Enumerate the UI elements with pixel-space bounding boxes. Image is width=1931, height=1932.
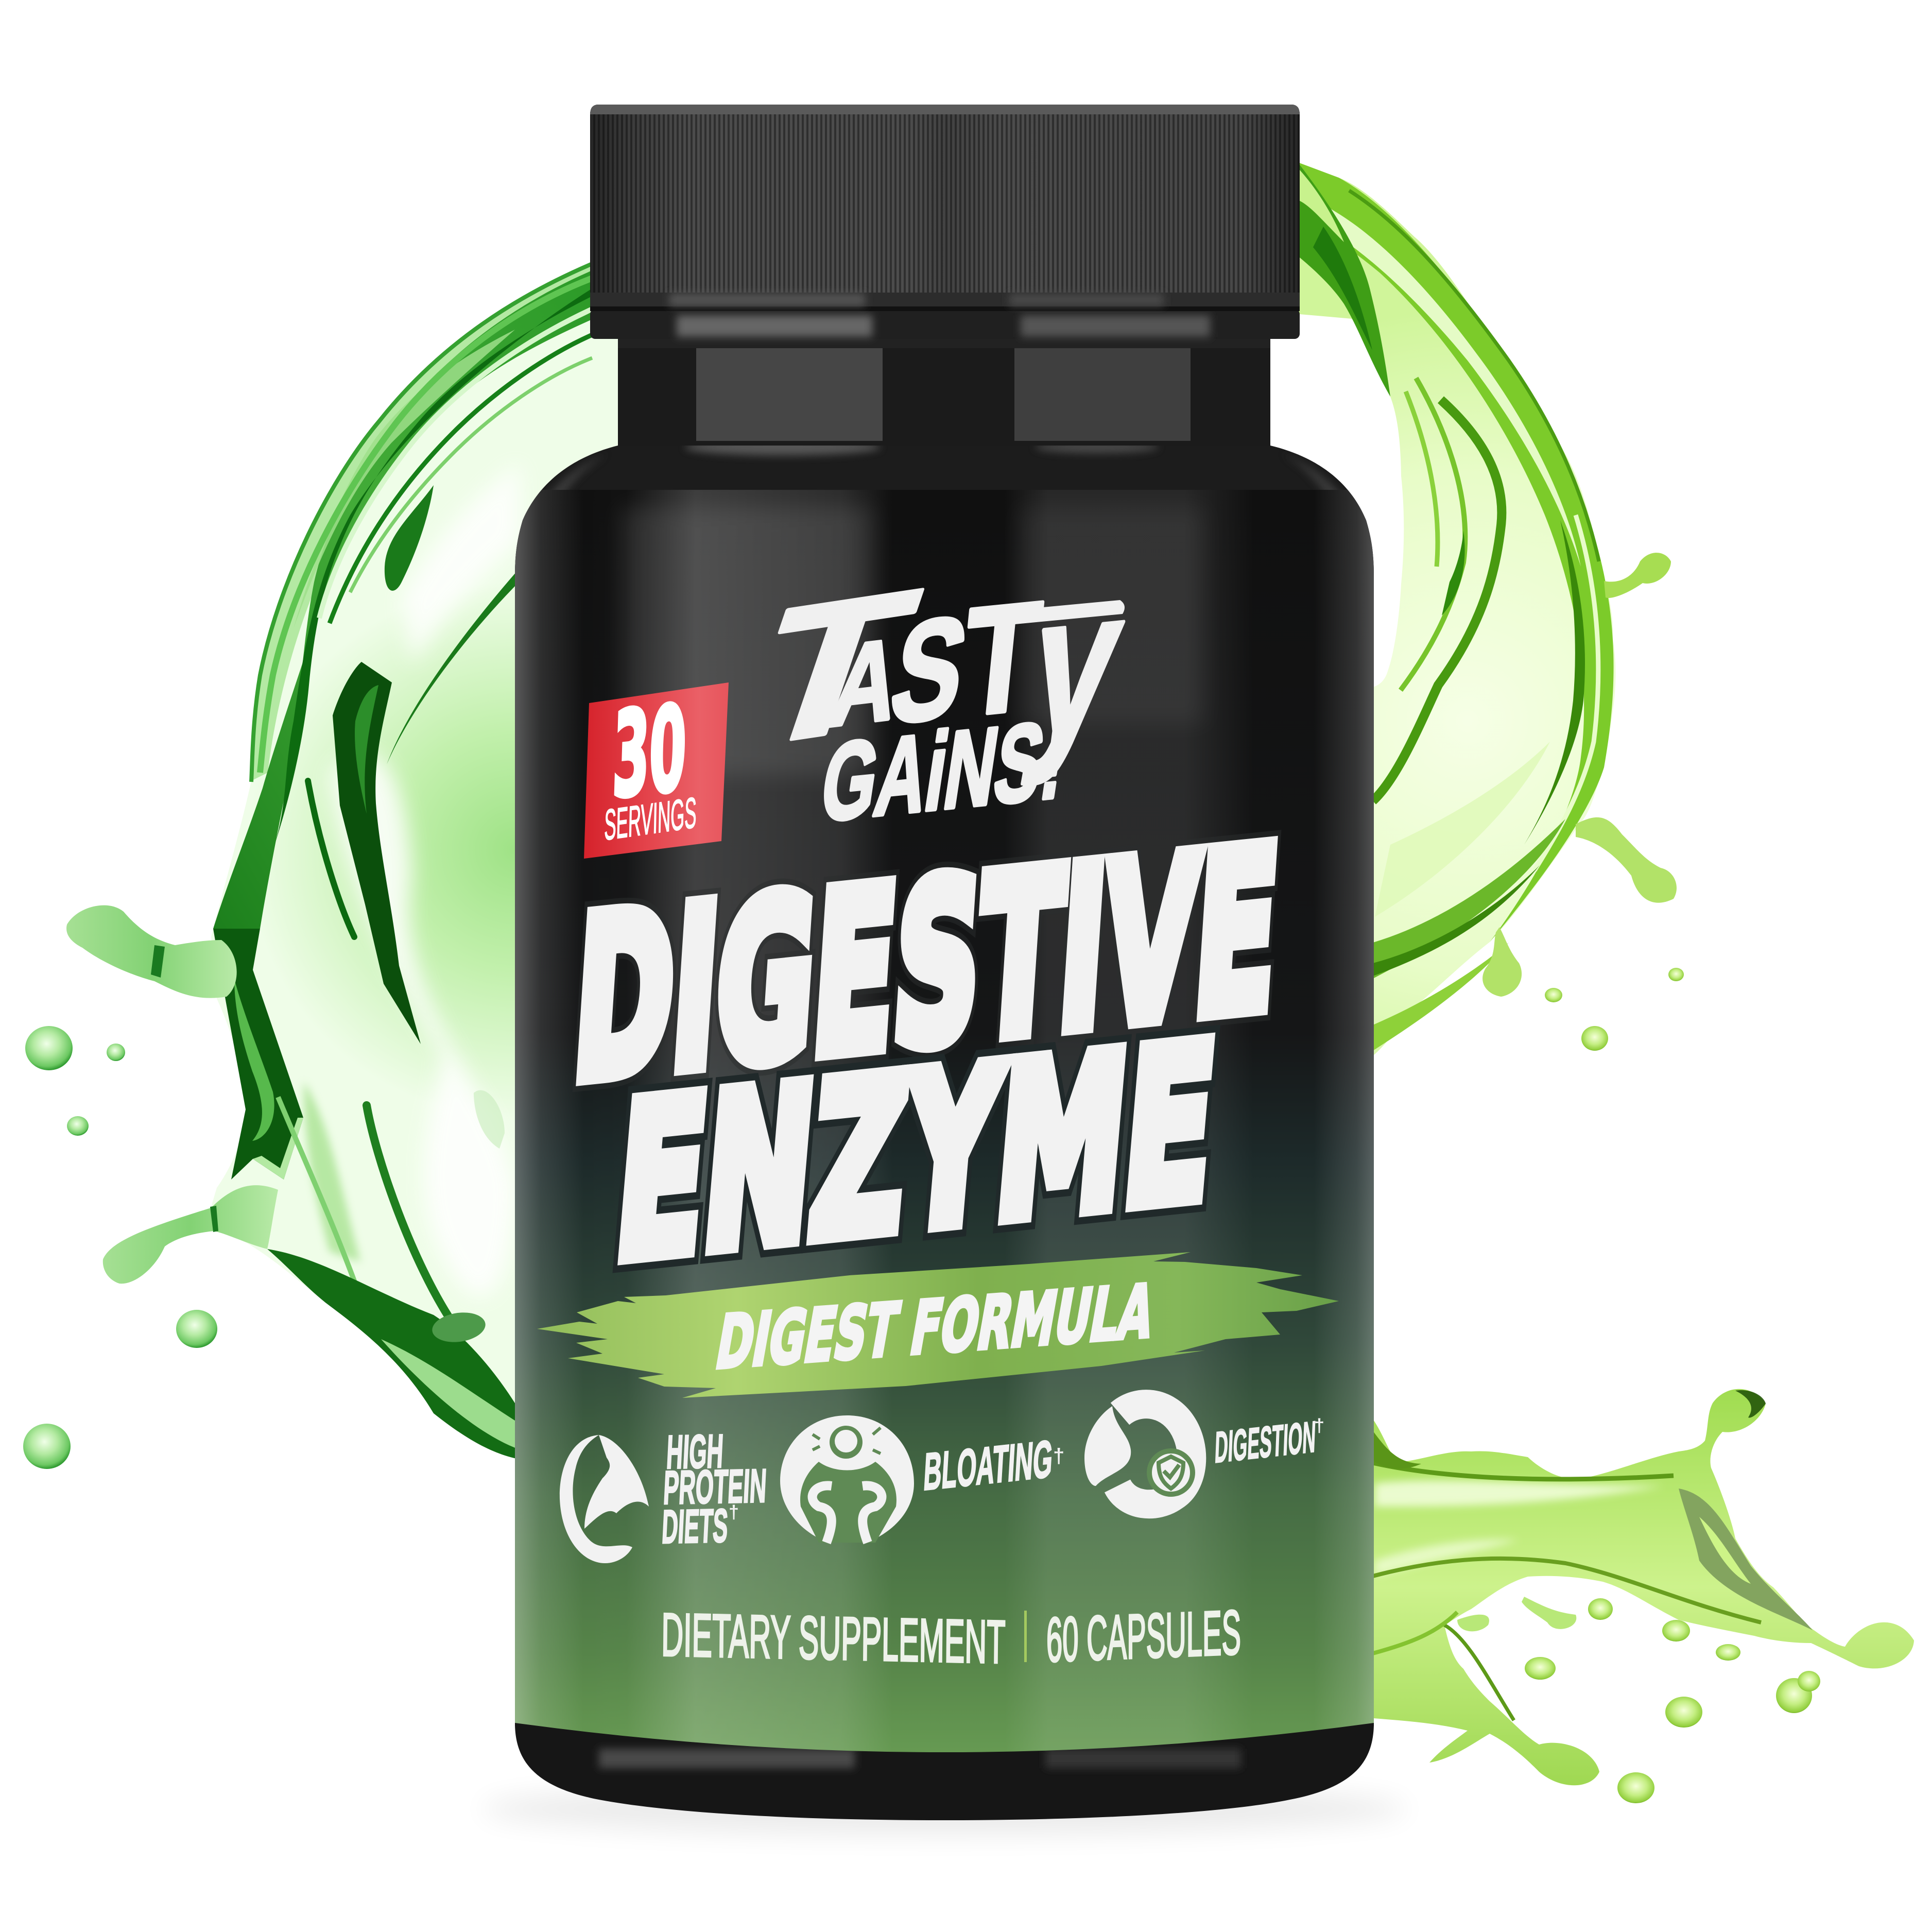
ribbed cap [590, 105, 1300, 306]
product name: digestive enzyme: ENZYME [608, 998, 1223, 1308]
text: digestion [1214, 1412, 1324, 1473]
brand logo [725, 542, 1140, 845]
left green liquid swirl [66, 258, 669, 1459]
brand logo: y [1014, 542, 1140, 788]
small arms from splash [1457, 1615, 1489, 1631]
digest formula brush banner [537, 1252, 1339, 1398]
lower droplet arm [1482, 927, 1522, 997]
right upper green liquid swirl [1277, 155, 1677, 1056]
arc strands [251, 264, 592, 782]
splash dark streaks [1373, 1463, 1674, 1479]
text: digestion: † [1314, 1415, 1324, 1436]
label sheen [510, 490, 1380, 1752]
text: bloating [922, 1429, 1064, 1501]
lower-left dark mass [213, 929, 303, 1179]
text: bloating: BLOATING [922, 1429, 1055, 1501]
outer green band [213, 270, 592, 929]
icon text: high protein diets: DIETS [661, 1499, 729, 1553]
left droplets [23, 1026, 217, 1469]
right lower green liquid splash [1359, 1389, 1914, 1785]
icon: stomach with shield [1084, 1404, 1193, 1504]
brand logo: A [822, 614, 909, 751]
brand logo: GAiNS! [814, 697, 1075, 845]
text: dietary supplement / 60 capsules: DIETARY SUPPLEMENT [661, 1601, 1006, 1677]
large dark streak [333, 662, 421, 1044]
lower arm with droplet [103, 1185, 278, 1284]
lower interior streaks [367, 1105, 453, 1324]
icon text: high protein diets [661, 1425, 768, 1553]
servings badge: SERVINGS [604, 788, 697, 849]
text: 60 CAPSULES [1046, 1597, 1241, 1675]
lower dark band [267, 1249, 516, 1459]
neck ring [590, 306, 1300, 339]
digest formula brush banner: DIGEST FORMULA [710, 1269, 1160, 1386]
cap-side dark green reflection [1300, 165, 1390, 397]
icon text: high protein diets: HIGH [665, 1425, 725, 1479]
top arm with droplet [66, 905, 237, 998]
brand logo: T [725, 547, 939, 789]
product name: digestive enzyme: DIGESTIVE [567, 801, 1285, 1130]
interior dark streaks [1373, 400, 1502, 801]
bottle [510, 105, 1380, 1834]
icon: bloating person [780, 1415, 914, 1543]
dark eye streak [385, 485, 434, 591]
bottle body [510, 438, 1380, 1834]
bottom reflections [599, 1749, 855, 1768]
product name: digestive enzyme: DIGESTIVE [567, 801, 1285, 1130]
small droplet on swirl [430, 1309, 487, 1345]
text: DIGESTION [1214, 1412, 1317, 1473]
servings badge: 30 [611, 681, 688, 824]
right lower droplets [1525, 1598, 1820, 1803]
brand logo: T [956, 569, 1047, 749]
middle droplet arm [1576, 817, 1677, 903]
icon text: high protein diets: † [729, 1501, 739, 1523]
right upper droplets [1545, 968, 1684, 1051]
product label panel [510, 490, 1380, 1752]
text: bloating: † [1053, 1445, 1064, 1467]
floor shadow [481, 1783, 1408, 1835]
bottle neck [618, 335, 1270, 453]
product name: digestive enzyme: ENZYME [608, 998, 1223, 1308]
product name: digestive enzyme [567, 801, 1285, 1308]
right outer band [1277, 155, 1614, 942]
icon: muscle arm [560, 1435, 649, 1563]
brand logo: S [880, 586, 978, 755]
top droplet arm [1604, 553, 1671, 598]
text: PROTEIN [662, 1459, 768, 1514]
servings badge [584, 681, 729, 859]
